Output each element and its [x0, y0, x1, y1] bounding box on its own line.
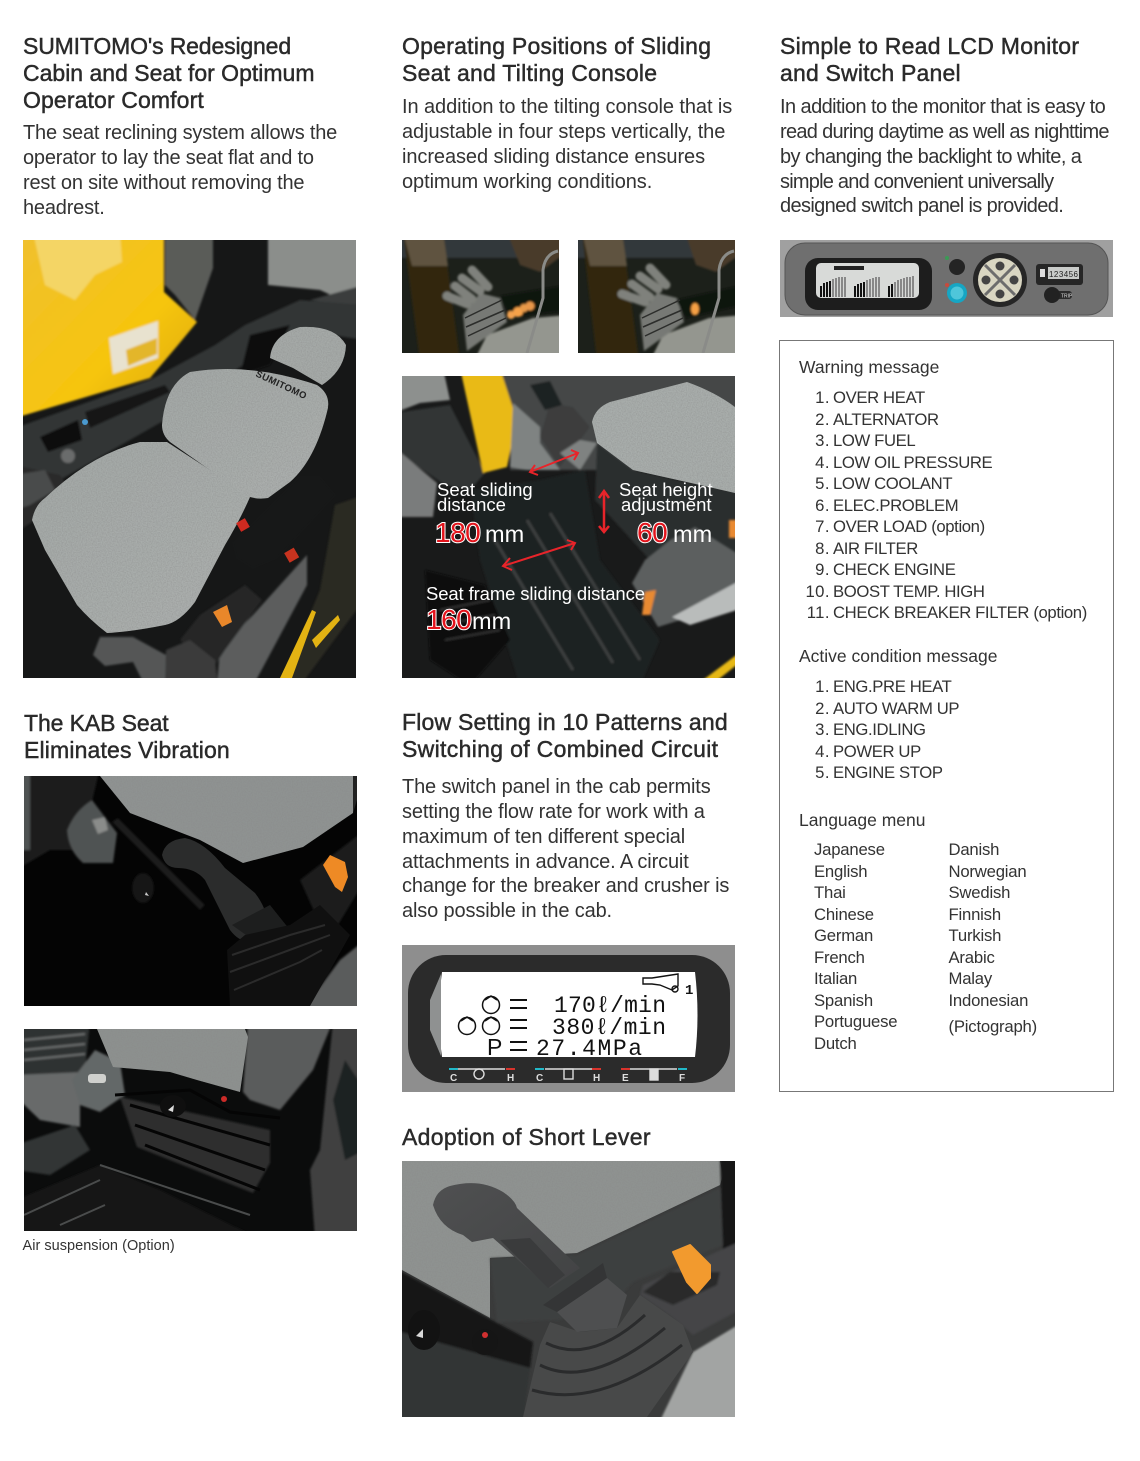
- list: languages: German: [814, 926, 873, 945]
- monitor screen: [805, 258, 932, 310]
- label: seat sliding distance: 180: [435, 517, 480, 548]
- list: active condition messages: ENG.IDLING: [833, 720, 926, 739]
- text: seat reclining: [23, 122, 337, 219]
- list: warning messages: CHECK ENGINE: [833, 560, 955, 579]
- rubber boot: [523, 1295, 693, 1417]
- heading: LCD monitor: [780, 32, 1079, 86]
- text: flow setting: maximum of ten different special: [402, 826, 685, 848]
- list: languages: Swedish: [948, 883, 1010, 902]
- LCD flow display: F: [679, 1073, 685, 1084]
- lever grip: [433, 1183, 580, 1288]
- list: warning messages: ALTERNATOR: [833, 410, 939, 428]
- list: warning messages: 5.: [815, 474, 830, 493]
- text: flow setting: setting the flow rate for work with a: [402, 801, 705, 823]
- LCD flow display: 27.4MPa: [536, 1036, 642, 1062]
- console: [93, 495, 364, 686]
- label: seat sliding distance: mm: [485, 521, 524, 547]
- label: seat height adjustment: adjustment: [621, 494, 712, 515]
- list: warning messages: AIR FILTER: [833, 538, 918, 558]
- text: tilting console: [402, 96, 732, 193]
- text: flow setting: [402, 776, 729, 922]
- text: LCD monitor: [780, 96, 1109, 217]
- list: languages: French: [814, 948, 865, 966]
- text: seat reclining: The seat reclining system allows the: [23, 122, 337, 144]
- list: languages: [814, 840, 1037, 1052]
- seat fabric: [402, 1161, 723, 1318]
- heading: language menu: Language menu: [799, 810, 926, 830]
- LCD flow display: C: [450, 1073, 457, 1084]
- list: languages: Thai: [814, 883, 846, 902]
- list: warning messages: ELEC.PROBLEM: [833, 496, 958, 514]
- text: seat reclining: rest on site without removing the: [23, 172, 304, 194]
- pump icons and values: [458, 996, 500, 1034]
- list: warning messages: LOW FUEL: [833, 431, 915, 450]
- list: languages: (Pictograph): [948, 1016, 1037, 1036]
- list: active condition messages: ENGINE STOP: [833, 763, 943, 782]
- text: tilting console: increased sliding distance ensures: [402, 146, 705, 168]
- photo: reclined operator seat: [23, 240, 356, 678]
- lever: [162, 838, 267, 941]
- label: seat sliding distance: Seat sliding: [437, 479, 533, 500]
- rubber boot: [227, 905, 350, 1006]
- heading: active condition message: Active condition message: [799, 646, 997, 666]
- LCD flow display: P: [487, 1034, 502, 1060]
- heading: cabin and seat: Cabin and Seat for Optimum: [23, 60, 314, 86]
- right lever: [632, 520, 743, 686]
- gauge scale: [458, 1068, 677, 1070]
- LCD flow display: 170ℓ/min: [554, 993, 666, 1019]
- armrest: [233, 477, 335, 568]
- list: languages: English: [814, 862, 867, 880]
- heading: flow setting: Switching of Combined Circuit: [402, 736, 718, 762]
- heading: flow setting: Flow Setting in 10 Patterns and: [402, 708, 728, 734]
- list: languages: Indonesian: [948, 990, 1028, 1010]
- label: seat height adjustment: [619, 479, 713, 548]
- label: seat sliding distance: distance: [437, 494, 506, 515]
- list: languages: Danish: [948, 840, 999, 859]
- list: warning messages: CHECK BREAKER FILTER (option): [833, 603, 1087, 622]
- list: languages: Norwegian: [948, 862, 1026, 880]
- list: warning messages: 4.: [815, 452, 830, 472]
- LCD flow display: C: [536, 1073, 543, 1084]
- label: seat height adjustment: 60: [637, 517, 667, 548]
- hour meter: [1036, 264, 1083, 303]
- list: warning messages: 11.: [807, 603, 830, 622]
- list: active condition messages: 2.: [815, 698, 830, 718]
- photo: monitor and switch panel: [780, 240, 1113, 317]
- text: flow setting: change for the breaker and crusher is: [402, 875, 729, 897]
- text: LCD monitor: In addition to the monitor that is easy to: [780, 96, 1105, 118]
- logo: SUMITOMO: [254, 369, 308, 402]
- seat bracket: [67, 800, 205, 910]
- list: languages: Arabic: [948, 948, 995, 966]
- heading: warning message: Warning message: [799, 357, 939, 377]
- LCD flow display: 380ℓ/min: [552, 1015, 666, 1041]
- list: languages: Dutch: [814, 1034, 857, 1052]
- list: languages: Turkish: [948, 926, 1001, 945]
- list: active condition messages: POWER UP: [833, 742, 921, 760]
- LCD flow display: H: [593, 1073, 600, 1084]
- seat cushion: [32, 442, 250, 633]
- hour meter: 123456: [1049, 270, 1079, 279]
- list: warning messages: LOW OIL PRESSURE: [833, 452, 992, 472]
- headrest: [270, 327, 346, 385]
- list: languages: Chinese: [814, 904, 874, 924]
- arrow: frame sliding: [503, 540, 575, 570]
- heading: operating positions: Seat and Tilting Console: [402, 60, 657, 86]
- text: LCD monitor: read during daytime as well as nighttime: [780, 121, 1109, 143]
- list: warning messages: OVER LOAD (option): [833, 517, 985, 536]
- list: languages: Japanese: [814, 840, 885, 859]
- heading: KAB seat: The KAB Seat: [24, 710, 169, 736]
- list: warning messages: 8.: [815, 538, 830, 558]
- heading: KAB seat: Eliminates Vibration: [24, 737, 230, 763]
- list: languages: Portuguese: [814, 1012, 897, 1031]
- list: active condition messages: 1.: [815, 677, 830, 696]
- text: seat reclining: operator to lay the seat flat and to: [23, 147, 314, 169]
- list: warning messages: 9.: [815, 560, 830, 579]
- heading: LCD monitor: and Switch Panel: [780, 60, 961, 86]
- heading: cabin and seat: Operator Comfort: [23, 87, 204, 113]
- heading: operating positions: [402, 32, 711, 86]
- text: flow setting: also possible in the cab.: [402, 900, 612, 922]
- text: flow setting: The switch panel in the cab permits: [402, 776, 711, 798]
- heading: KAB seat: [24, 710, 230, 763]
- LCD flow display: 1: [685, 983, 693, 999]
- four-way switch: [973, 253, 1027, 307]
- list: warning messages: 3.: [815, 431, 830, 450]
- label: seat sliding distance: [435, 479, 533, 548]
- label: seat frame sliding distance: 160: [426, 604, 471, 635]
- label: seat frame sliding distance: mm: [472, 608, 511, 634]
- list: active condition messages: [815, 677, 959, 782]
- list: active condition messages: ENG.PRE HEAT: [833, 677, 951, 696]
- heading: short lever: Adoption of Short Lever: [402, 1124, 651, 1150]
- photo: short lever: [402, 1161, 735, 1417]
- list: warning messages: 10.: [805, 582, 830, 600]
- list: active condition messages: 3.: [815, 720, 830, 739]
- list: warning messages: LOW COOLANT: [833, 474, 952, 493]
- caption: air suspension: Air suspension (Option): [22, 1238, 175, 1254]
- heading: LCD monitor: Simple to Read LCD Monitor: [780, 32, 1079, 58]
- list: active condition messages: AUTO WARM UP: [833, 698, 959, 718]
- list: warning messages: 6.: [815, 496, 830, 514]
- list: warning messages: 2.: [815, 410, 830, 428]
- label: seat frame sliding distance: Seat frame sliding distance: [426, 583, 645, 604]
- arrow: seat height: [599, 491, 609, 532]
- seat back: [162, 369, 328, 499]
- diagram: seat adjustment distances: [402, 376, 735, 678]
- list: languages: Spanish: [814, 990, 873, 1010]
- list: languages: Malay: [948, 969, 992, 988]
- text: flow setting: attachments in advance. A circuit: [402, 851, 689, 873]
- label: seat frame sliding distance: [426, 583, 645, 635]
- text: LCD monitor: by changing the backlight to white, a: [780, 146, 1081, 168]
- panel: message and language lists: [779, 340, 1114, 1092]
- list: active condition messages: 5.: [815, 763, 830, 782]
- list: warning messages: 1.: [815, 388, 830, 407]
- text: LCD monitor: designed switch panel is provided.: [780, 195, 1063, 217]
- list: languages: Finnish: [948, 904, 1001, 924]
- text: LCD monitor: simple and convenient universally: [780, 171, 1053, 193]
- list: warning messages: 7.: [815, 517, 830, 536]
- heading: operating positions: Operating Positions of Sliding: [402, 32, 711, 58]
- photo: console lowered: [578, 240, 735, 353]
- tool icon and pattern number: [643, 974, 678, 992]
- photo: air suspension seat: [24, 1029, 357, 1231]
- photo: console raised: [402, 240, 559, 353]
- label: seat height adjustment: Seat height: [619, 479, 713, 500]
- seat cushion: [100, 776, 353, 863]
- list: warning messages: [805, 388, 1087, 622]
- heading: cabin and seat: [23, 32, 314, 114]
- LCD flow display: H: [507, 1073, 514, 1084]
- round switches: [945, 256, 967, 303]
- heading: cabin and seat: SUMITOMO's Redesigned: [23, 32, 291, 58]
- LCD flow display: [402, 945, 735, 1092]
- hour meter: TRIP: [1061, 294, 1073, 300]
- list: warning messages: OVER HEAT: [833, 388, 925, 407]
- text: tilting console: adjustable in four steps vertically, the: [402, 121, 725, 143]
- heading: flow setting: [402, 708, 728, 762]
- label: seat height adjustment: mm: [673, 521, 712, 547]
- text: tilting console: optimum working conditions.: [402, 171, 652, 193]
- text: seat reclining: headrest.: [23, 197, 105, 219]
- suspension bellows: [115, 1090, 280, 1190]
- photo: KAB seat: [24, 776, 357, 1006]
- list: languages: Italian: [814, 969, 857, 988]
- list: warning messages: BOOST TEMP. HIGH: [833, 582, 985, 600]
- list: active condition messages: 4.: [815, 742, 830, 760]
- seat cushion: [97, 1029, 248, 1092]
- text: tilting console: In addition to the tilting console that is: [402, 96, 732, 118]
- seat cushion: [592, 382, 735, 493]
- LCD flow display: E: [622, 1073, 629, 1084]
- arrow: seat sliding: [530, 450, 578, 475]
